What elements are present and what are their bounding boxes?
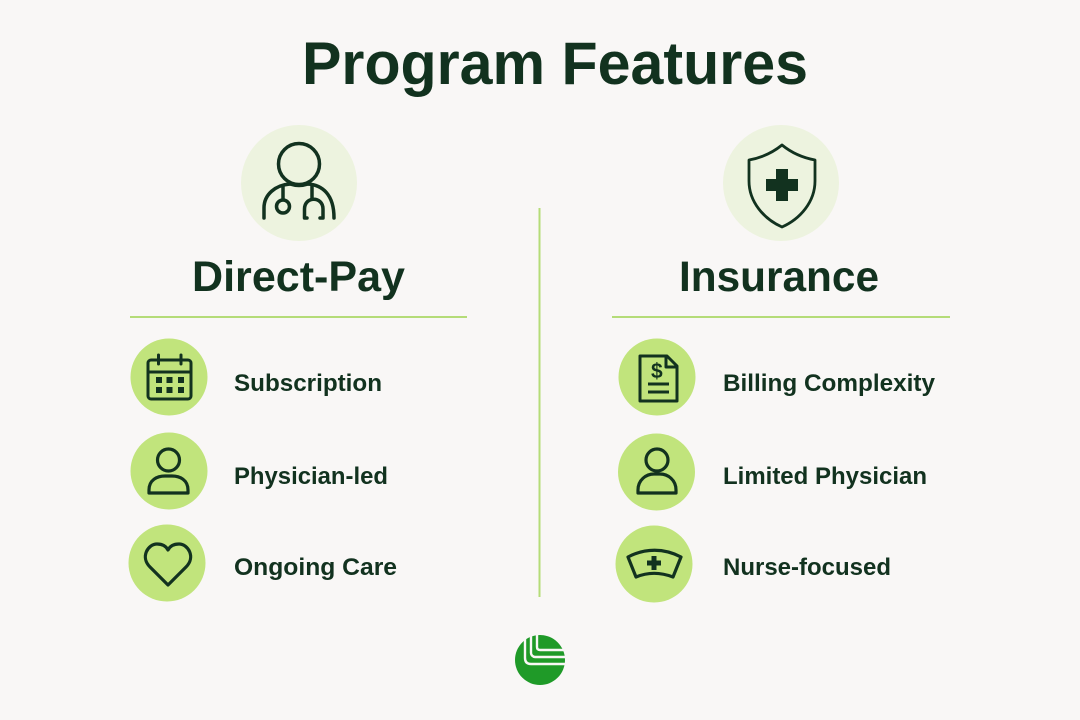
label: Billing Complexity (723, 370, 936, 397)
icon: nurse cap (628, 550, 681, 577)
logo (515, 634, 568, 685)
label: Subscription (234, 370, 382, 397)
icon: calendar (148, 355, 191, 399)
label: Ongoing Care (234, 554, 397, 581)
icon: invoice (640, 356, 677, 401)
row: billing complexity (618, 338, 936, 416)
label: Nurse-focused (723, 554, 891, 581)
row: physician-led (130, 432, 388, 510)
icon: person (638, 449, 676, 493)
row: nurse-focused (616, 526, 891, 602)
heading: direct-pay: Direct-Pay (192, 253, 405, 301)
dollar sign: $ (651, 360, 663, 383)
row: limited physician (618, 434, 927, 510)
panel: direct-pay (128, 125, 467, 602)
label: Limited Physician (723, 463, 927, 490)
icon: person (149, 449, 188, 493)
title: Program Features (302, 30, 808, 97)
icon: doctor with stethoscope (241, 125, 357, 241)
panel: insurance (612, 125, 950, 602)
rule (612, 316, 950, 318)
rule (130, 316, 467, 318)
row: ongoing care (128, 524, 397, 602)
heading: insurance: Insurance (679, 253, 879, 301)
icon: shield with cross (723, 125, 839, 241)
icon: heart (145, 544, 191, 585)
label: Physician-led (234, 463, 388, 490)
center divider (538, 208, 540, 597)
row: subscription (130, 338, 382, 416)
